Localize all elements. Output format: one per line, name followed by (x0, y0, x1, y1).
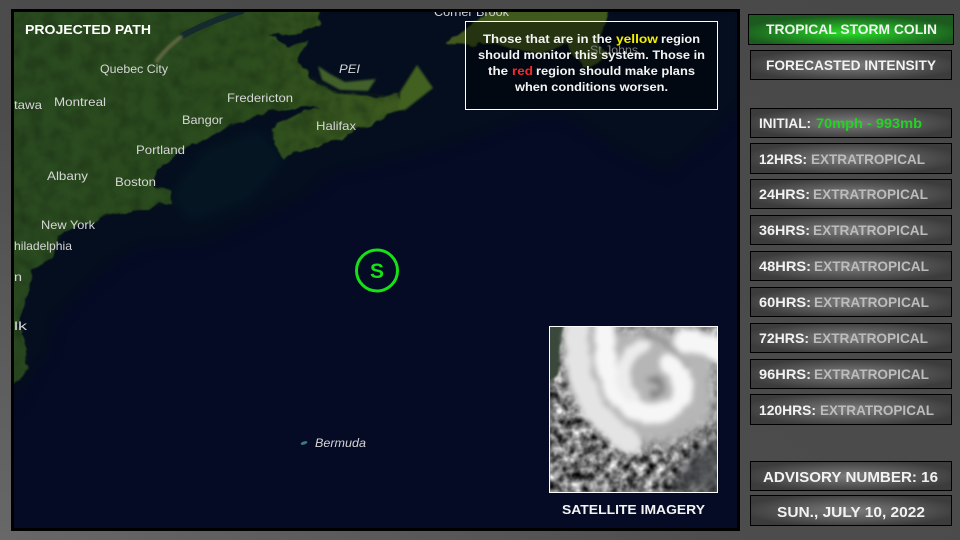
city labels: St Johns (590, 43, 638, 57)
box: advisory number: ADVISORY NUMBER: 16 (763, 469, 938, 486)
title box: storm name (748, 14, 954, 44)
water: Northumberland strait (322, 85, 386, 98)
row: 24 hours (750, 180, 952, 208)
city labels: tawa (14, 98, 42, 112)
satellite cloud texture (550, 327, 717, 492)
callout: region guidance: should monitor this system. Those in (478, 48, 705, 62)
box: advisory number (750, 462, 952, 490)
land: Cape Breton (398, 65, 433, 110)
row: 12 hours (750, 144, 952, 174)
row: 12 hours: 12HRS: (759, 151, 807, 167)
heading box: forecasted intensity: FORECASTED INTENSITY (766, 57, 937, 73)
shelf shallows (170, 130, 285, 222)
city labels: Boston (115, 175, 156, 189)
heading box: forecasted intensity (750, 50, 952, 80)
city labels: hiladelphia (14, 239, 72, 253)
label: satellite imagery: SATELLITE IMAGERY (562, 502, 705, 517)
city labels: Bermuda (315, 436, 366, 450)
row: 48 hours: 48HRS: (759, 258, 811, 274)
river: St Lawrence (182, 11, 242, 36)
city labels: Halifax (316, 119, 356, 133)
city labels: New York (41, 218, 96, 232)
land: Newfoundland (447, 5, 613, 67)
satellite hazy upper deck (560, 327, 717, 448)
callout: region guidance: red (512, 64, 533, 78)
panel: projected path map (5, 5, 745, 530)
row: 36 hours: 36HRS: (759, 222, 810, 238)
box: advisory date: SUN., JULY 10, 2022 (777, 504, 925, 521)
river: St Lawrence estuary (156, 36, 182, 62)
icon: storm marker (356, 250, 398, 291)
callout: region guidance: when conditions worsen. (514, 80, 668, 94)
city labels: Quebec City (100, 62, 168, 76)
callout: region guidance: Those that are in the (483, 32, 612, 46)
city labels: n (14, 270, 22, 284)
row: 60 hours: EXTRATROPICAL (814, 294, 929, 310)
row: initial intensity: INITIAL: (759, 115, 811, 131)
panel: satellite imagery (549, 326, 718, 493)
row: 24 hours: 24HRS: (759, 186, 810, 202)
row: 96 hours: EXTRATROPICAL (814, 366, 929, 382)
callout: region guidance: region (661, 32, 700, 46)
icon: storm marker: S (370, 260, 384, 283)
box: advisory date (750, 496, 952, 526)
row: 24 hours: EXTRATROPICAL (813, 186, 928, 202)
row: 12 hours: EXTRATROPICAL (811, 151, 925, 167)
row: initial intensity (750, 108, 952, 138)
city labels: Bangor (182, 113, 223, 127)
row: 120 hours (750, 394, 952, 424)
row: initial intensity: 70mph - 993mb (816, 115, 922, 131)
row: 120 hours: EXTRATROPICAL (820, 402, 934, 418)
row: 48 hours: EXTRATROPICAL (814, 258, 929, 274)
title box: storm name: TROPICAL STORM COLIN (766, 21, 937, 37)
land mottling (14, 12, 398, 342)
callout: region guidance (466, 22, 718, 110)
callout: region guidance: region should make plans (536, 64, 695, 78)
city labels: Fredericton (227, 91, 293, 105)
row: 36 hours: EXTRATROPICAL (813, 222, 928, 238)
city labels: lk (14, 319, 28, 333)
satellite dark regions (550, 327, 564, 383)
land: Prince Edward Island (318, 66, 376, 91)
row: 96 hours (750, 360, 952, 388)
row: 96 hours: 96HRS: (759, 366, 811, 382)
city labels: Corner Brook (434, 5, 510, 19)
row: 60 hours (750, 288, 952, 316)
icon: Bermuda island (300, 441, 308, 445)
heading: projected path: PROJECTED PATH (25, 22, 151, 37)
satellite swirl (577, 320, 726, 442)
land: mainland North America (5, 5, 400, 390)
row: 36 hours (750, 216, 952, 244)
row: 120 hours: 120HRS: (759, 402, 816, 418)
city labels: PEI (339, 62, 361, 76)
row: 48 hours (750, 252, 952, 280)
continental shelf (14, 5, 745, 410)
callout: region guidance: yellow (616, 32, 659, 46)
callout: region guidance: the (488, 64, 508, 78)
city labels: Albany (47, 169, 88, 183)
row: 72 hours (750, 324, 952, 352)
row: 72 hours: 72HRS: (759, 330, 809, 346)
city labels: Portland (136, 143, 185, 157)
city labels (14, 5, 638, 450)
city labels: Montreal (54, 95, 106, 109)
row: 60 hours: 60HRS: (759, 294, 811, 310)
row: 72 hours: EXTRATROPICAL (813, 330, 928, 346)
